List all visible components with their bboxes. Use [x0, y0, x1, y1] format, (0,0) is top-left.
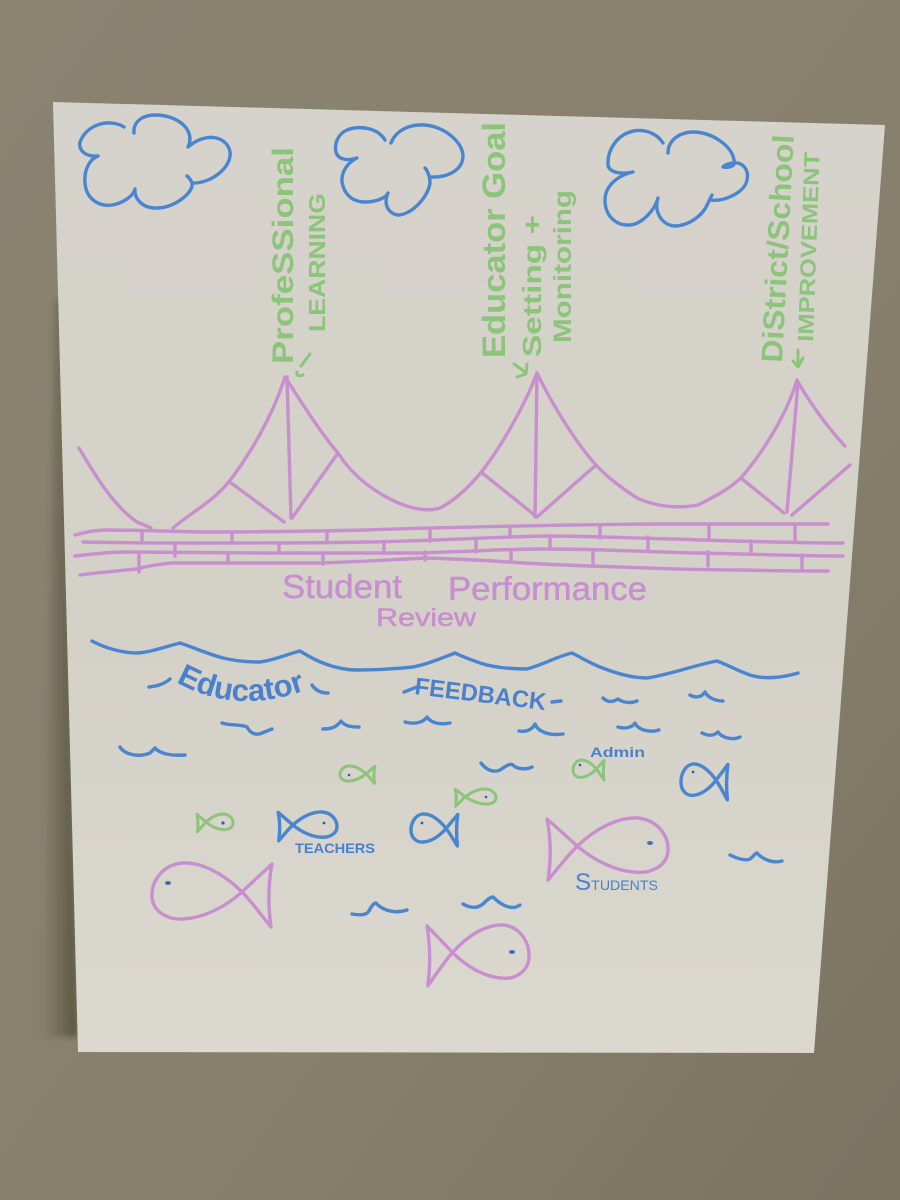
small waves: [120, 692, 782, 915]
towers: [287, 377, 291, 518]
heading: Educator Goal Setting + Monitoring: Educator Goal: [476, 122, 512, 358]
green fish: center: [455, 789, 496, 806]
green fish: upper center: [340, 766, 375, 783]
paper sheet: [53, 102, 885, 1053]
bridge label: Student Performance Review: Review: [376, 604, 477, 632]
heading: Professional Learning: [267, 147, 330, 364]
blue fish: right: [681, 764, 728, 800]
green fish: admin: [573, 760, 604, 780]
blue fish: teachers: [278, 812, 375, 856]
pink fish: bottom: [427, 925, 529, 986]
small green arrows: [297, 350, 803, 377]
green fish: far left: [197, 814, 233, 832]
bridge label: Student Performance Review: Student: [282, 568, 402, 605]
pink fish: students: [547, 818, 668, 896]
clouds: [80, 115, 748, 226]
bridge label: Student Performance Review: [282, 568, 647, 632]
icon: cloud 3: [605, 130, 748, 226]
label: Teachers: TEACHERS: [295, 840, 375, 856]
main cable: [79, 373, 845, 528]
heading: District / School Improvement: IMPROVEMENT: [793, 151, 825, 342]
label: Students: STUDENTS: [575, 869, 658, 896]
heading: Educator Goal Setting + Monitoring: [476, 122, 577, 358]
bridge label: Student Performance Review: Performance: [448, 570, 647, 607]
heading: Educator Goal Setting + Monitoring: Setting +: [517, 215, 547, 357]
hangers: [231, 483, 284, 522]
blue fish: center: [411, 814, 458, 846]
heading: Educator Goal Setting + Monitoring: Monitoring: [549, 190, 577, 343]
icon: cloud 2: [335, 125, 463, 215]
pink fish: left: [152, 863, 272, 927]
deck ticks: [142, 524, 795, 542]
deck: [75, 524, 828, 535]
water line: [92, 641, 798, 678]
bridge: [75, 373, 850, 575]
heading: Professional Learning: LEARNING: [304, 193, 330, 332]
water label: Educator Feedback: Educator: [178, 664, 302, 702]
heading: Professional Learning: ProfeSSional: [267, 147, 300, 364]
icon: cloud 1: [80, 115, 230, 208]
water label: Educator Feedback: [147, 664, 563, 716]
label: Admin: Admin: [590, 744, 645, 760]
water label: Educator Feedback: FEEDBACK: [413, 673, 548, 716]
heading: District / School Improvement: [756, 134, 825, 363]
heading: District / School Improvement: DiStrict/School: [756, 134, 801, 363]
